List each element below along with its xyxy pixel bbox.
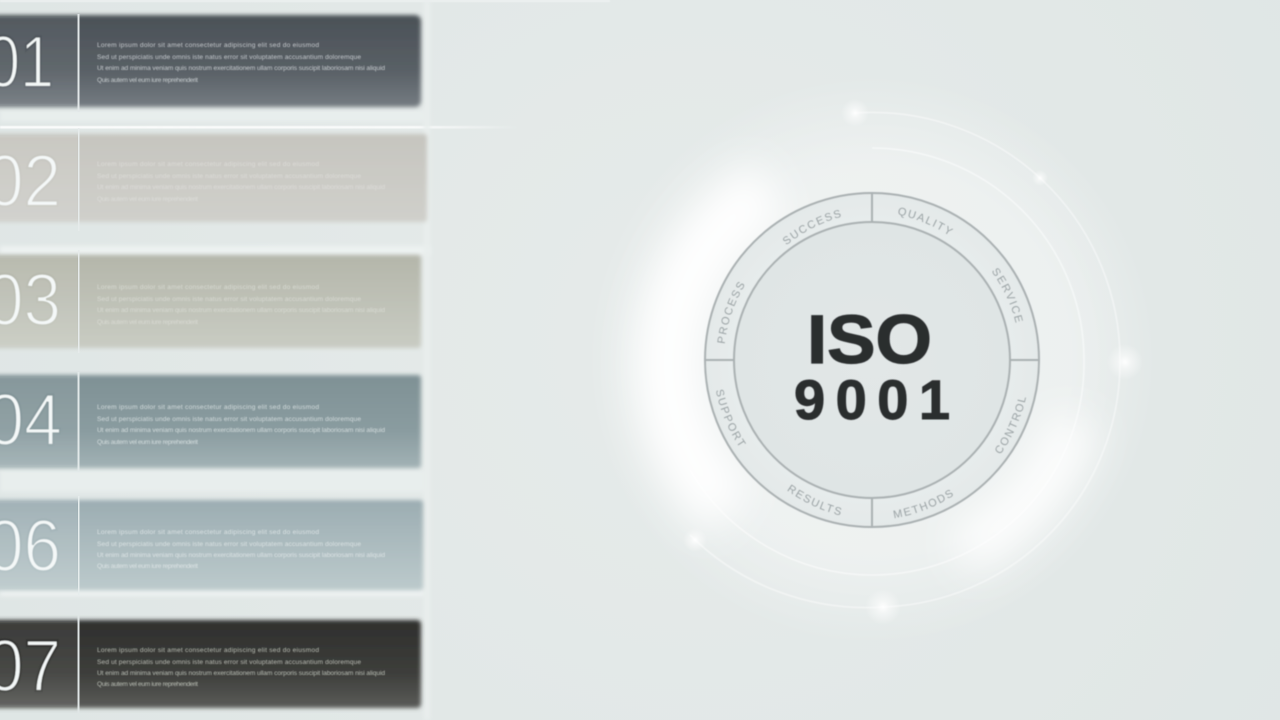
ring labels: CONTROL — [995, 397, 1026, 454]
panel: row 01 — [0, 14, 421, 112]
row 06 number segment — [0, 502, 77, 588]
ring labels: SUPPORT — [716, 389, 746, 446]
row 04 text: Ut enim ad minima veniam quis nostrum exercitationem ullam corporis suscipit laboriosam nisi aliquid — [97, 427, 385, 434]
row 06 text: Lorem ipsum dolor sit amet consectetur adipiscing elit sed do eiusmod — [97, 529, 319, 536]
badge disc — [705, 193, 1039, 527]
row 02 text: Quis autem vel eum iure reprehenderit — [97, 196, 198, 203]
row 03 text: Quis autem vel eum iure reprehenderit — [97, 319, 198, 326]
panel: row 04 — [0, 372, 421, 472]
row 06 text: Ut enim ad minima veniam quis nostrum exercitationem ullam corporis suscipit laboriosam nisi aliquid — [97, 552, 385, 559]
row 01 text: Sed ut perspiciatis unde omnis iste natus error sit voluptatem accusantium doloremque — [97, 54, 361, 61]
panel: light streak lines — [0, 0, 610, 720]
row 01 number segment — [0, 17, 77, 105]
row 02 number segment — [0, 136, 77, 220]
panel: row 07 — [0, 615, 421, 713]
ring labels: RESULTS — [787, 484, 842, 516]
row 04 text: Lorem ipsum dolor sit amet consectetur adipiscing elit sed do eiusmod — [97, 404, 319, 411]
row 02 text — [97, 161, 385, 203]
ring outlines — [705, 193, 1039, 527]
row 03 number segment — [0, 257, 77, 346]
panel: row 02 — [0, 128, 427, 231]
row 04 background — [0, 375, 421, 468]
panel: row 06 — [0, 496, 423, 595]
row 07 text: Lorem ipsum dolor sit amet consectetur adipiscing elit sed do eiusmod — [97, 647, 319, 654]
title: ISO: ISO — [807, 301, 932, 378]
badge: ISO 9001 ring — [704, 192, 1040, 528]
row 01 text: Ut enim ad minima veniam quis nostrum exercitationem ullam corporis suscipit laboriosam nisi aliquid — [97, 65, 385, 72]
row 07 background — [0, 620, 421, 708]
row 02 divider — [78, 128, 80, 231]
row 04 text: Quis autem vel eum iure reprehenderit — [97, 439, 198, 446]
row 07 divider — [78, 615, 80, 713]
row 01 text: Lorem ipsum dolor sit amet consectetur adipiscing elit sed do eiusmod — [97, 42, 319, 49]
row 06 text: Sed ut perspiciatis unde omnis iste natus error sit voluptatem accusantium doloremque — [97, 541, 361, 548]
row 06 divider — [78, 496, 80, 595]
row 01 divider — [78, 14, 80, 112]
row 07 text: Ut enim ad minima veniam quis nostrum exercitationem ullam corporis suscipit laboriosam nisi aliquid — [97, 670, 385, 677]
row 02 text: Lorem ipsum dolor sit amet consectetur adipiscing elit sed do eiusmod — [97, 161, 319, 168]
row 07 number segment — [0, 622, 77, 706]
row 02 background — [0, 134, 427, 222]
row 01 background — [0, 15, 421, 107]
ring labels: SERVICE — [992, 268, 1024, 323]
ring labels — [716, 207, 1026, 518]
glow halo around badge — [587, 75, 1157, 645]
row 03 text: Sed ut perspiciatis unde omnis iste natus error sit voluptatem accusantium doloremque — [97, 296, 361, 303]
row 03 divider — [78, 250, 80, 353]
row 04 text: Sed ut perspiciatis unde omnis iste natus error sit voluptatem accusantium doloremque — [97, 416, 361, 423]
row 04 divider — [78, 372, 80, 472]
row 03 text: Ut enim ad minima veniam quis nostrum exercitationem ullam corporis suscipit laboriosam nisi aliquid — [97, 307, 385, 314]
row 04 number segment — [0, 377, 77, 466]
row 03 text: Lorem ipsum dolor sit amet consectetur adipiscing elit sed do eiusmod — [97, 284, 319, 291]
title: 9001: 9001 — [794, 368, 950, 431]
row 03 background — [0, 255, 421, 348]
row 06 text — [97, 529, 385, 570]
ring labels: QUALITY — [898, 207, 954, 234]
ring labels: METHODS — [893, 490, 954, 518]
row 06 background — [0, 500, 423, 590]
row 03 text — [97, 284, 385, 326]
row 07 text: Quis autem vel eum iure reprehenderit — [97, 681, 198, 688]
row 07 text — [97, 647, 385, 688]
row 02 text: Sed ut perspiciatis unde omnis iste natus error sit voluptatem accusantium doloremque — [97, 173, 361, 180]
ring labels: SUCCESS — [782, 210, 842, 244]
row 06 text: Quis autem vel eum iure reprehenderit — [97, 563, 198, 570]
row 07 text: Sed ut perspiciatis unde omnis iste natus error sit voluptatem accusantium doloremque — [97, 659, 361, 666]
panel: row 03 — [0, 250, 421, 353]
row 01 text — [97, 42, 385, 84]
row 02 text: Ut enim ad minima veniam quis nostrum exercitationem ullam corporis suscipit laboriosam nisi aliquid — [97, 184, 385, 191]
row 01 text: Quis autem vel eum iure reprehenderit — [97, 77, 198, 84]
ring labels: PROCESS — [716, 282, 744, 344]
row 04 text — [97, 404, 385, 446]
